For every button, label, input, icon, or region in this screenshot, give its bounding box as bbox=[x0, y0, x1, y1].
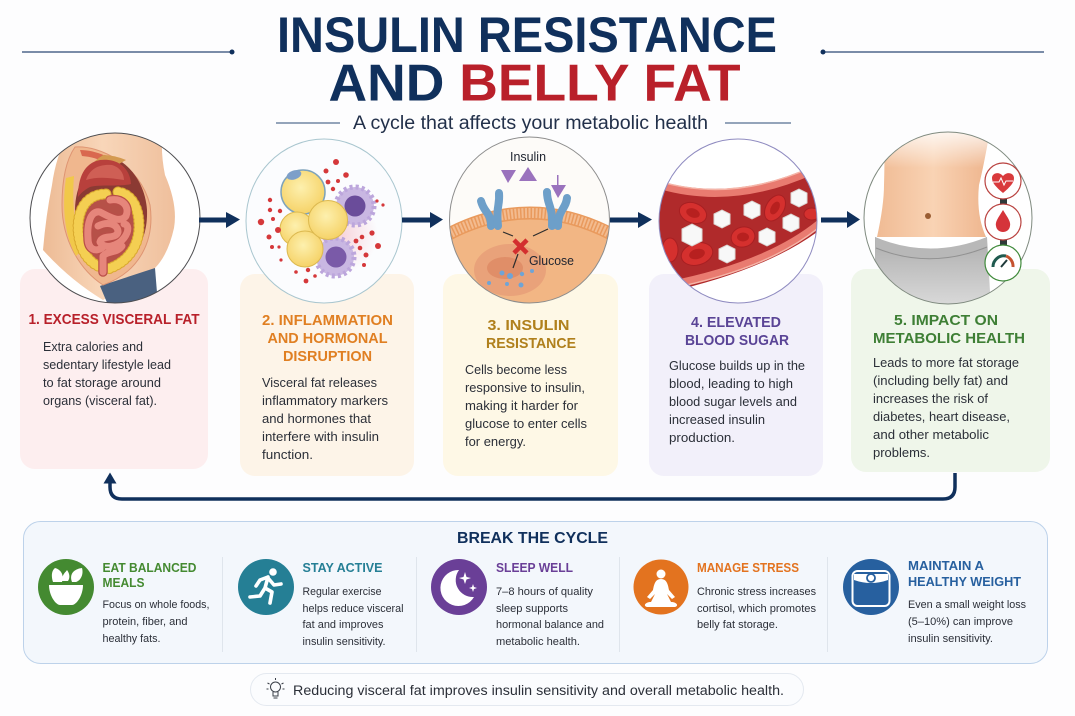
tip: sleep well bbox=[496, 561, 604, 648]
step 3 text bbox=[465, 362, 587, 449]
step 1 text: to fat storage around bbox=[43, 375, 161, 390]
tip: manage stress bbox=[697, 561, 816, 631]
subtitle: A cycle that affects your metabolic health bbox=[353, 113, 708, 134]
tip: maintain a healthy weight: insulin sensitivity. bbox=[908, 633, 993, 645]
arrow: cycle return bbox=[104, 472, 955, 499]
tip: stay active: STAY ACTIVE bbox=[302, 561, 382, 575]
tip: eat balanced meals: protein, fiber, and bbox=[102, 616, 188, 628]
step 4 heading: 4. ELEVATED bbox=[691, 315, 781, 331]
step 1 text: Extra calories and bbox=[43, 339, 143, 354]
step 1 heading: 1. EXCESS VISCERAL FAT bbox=[28, 312, 200, 328]
panel: step 2 card bbox=[240, 274, 414, 476]
signal arrow bbox=[503, 229, 548, 268]
panel: step 4 card bbox=[649, 274, 823, 476]
step 5 text: and other metabolic bbox=[873, 427, 990, 442]
tip: eat balanced meals: Focus on whole foods, bbox=[102, 599, 210, 611]
tip: maintain a healthy weight bbox=[908, 559, 1026, 645]
title bbox=[277, 7, 777, 112]
step 1 text bbox=[43, 339, 171, 408]
step 3 heading: 3. INSULIN bbox=[488, 318, 570, 334]
fat cells bbox=[280, 168, 348, 267]
step 3 text: Cells become less bbox=[465, 362, 567, 377]
step 2 text: interfere with insulin bbox=[262, 429, 379, 444]
left title rule bbox=[22, 50, 234, 54]
step 4 text: increased insulin bbox=[669, 412, 765, 427]
icon: gauge bbox=[985, 245, 1021, 281]
tip: stay active bbox=[302, 561, 404, 648]
liver bbox=[78, 160, 131, 197]
tip: sleep well: hormonal balance and bbox=[496, 619, 604, 631]
tip: stay active: fat and improves bbox=[302, 619, 384, 631]
illustration: abdomen with visceral fat bbox=[30, 130, 200, 305]
insulin label: Insulin bbox=[510, 149, 546, 164]
step 4 heading: BLOOD SUGAR bbox=[685, 333, 789, 349]
red blood cells bbox=[663, 194, 816, 266]
immune cell lower bbox=[316, 238, 354, 276]
illustration: insulin receptors on a cell bbox=[445, 137, 615, 310]
tip: maintain a healthy weight: Even a small weight loss bbox=[908, 599, 1026, 611]
glucose molecules bbox=[487, 269, 534, 288]
step 4 text: blood, leading to high bbox=[669, 376, 793, 391]
step 4 text: production. bbox=[669, 430, 735, 445]
step 3 text: making it harder for bbox=[465, 398, 579, 413]
step 5 heading: 5. IMPACT ON bbox=[894, 313, 998, 329]
icon: weight scale bbox=[843, 559, 899, 615]
step 4 text: blood sugar levels and bbox=[669, 394, 797, 409]
step 4 heading bbox=[685, 315, 789, 349]
tip: stay active: insulin sensitivity. bbox=[302, 636, 386, 648]
panel: break the cycle bbox=[24, 522, 1048, 664]
arrow: step 3 to 4 bbox=[610, 212, 652, 228]
step 2 text: inflammatory markers bbox=[262, 393, 388, 408]
tip: manage stress: Chronic stress increases bbox=[697, 586, 816, 598]
tip: manage stress: MANAGE STRESS bbox=[697, 561, 799, 575]
panel: step 1 card bbox=[20, 269, 208, 469]
tip: sleep well: sleep supports bbox=[496, 603, 568, 615]
step 2 text bbox=[262, 375, 388, 462]
step 5 text: diabetes, heart disease, bbox=[873, 409, 1010, 424]
title: INSULIN RESISTANCE bbox=[277, 7, 777, 63]
step 3 heading bbox=[486, 318, 576, 352]
step 5 heading: METABOLIC HEALTH bbox=[873, 331, 1025, 347]
illustration: blood vessel with sugar cubes bbox=[650, 139, 825, 303]
step 5 text bbox=[873, 355, 1019, 460]
inflammatory markers bbox=[258, 159, 385, 283]
tip: eat balanced meals: MEALS bbox=[102, 576, 144, 590]
step 5 text: problems. bbox=[873, 445, 930, 460]
immune cell upper bbox=[336, 187, 374, 225]
arrow: step 1 to 2 bbox=[199, 212, 240, 228]
step 3 heading: RESISTANCE bbox=[486, 336, 576, 352]
arrow: step 2 to 3 bbox=[402, 212, 443, 228]
step 1 text: sedentary lifestyle lead bbox=[43, 357, 171, 372]
illustration: healthy torso with metric icons bbox=[864, 130, 1032, 310]
sugar cubes bbox=[682, 189, 807, 263]
illustration: fat cells and inflammation bbox=[246, 139, 402, 303]
icon: runner bbox=[238, 559, 294, 615]
title: AND BELLY FAT bbox=[328, 54, 741, 112]
step 2 text: and hormones that bbox=[262, 411, 371, 426]
step 2 heading: DISRUPTION bbox=[283, 349, 372, 365]
tip: sleep well: SLEEP WELL bbox=[496, 561, 573, 575]
step 2 text: Visceral fat releases bbox=[262, 375, 377, 390]
tip: sleep well: metabolic health. bbox=[496, 636, 580, 648]
tip: maintain a healthy weight: (5–10%) can improve bbox=[908, 616, 1013, 628]
tip: eat balanced meals bbox=[102, 561, 210, 645]
tip: sleep well: 7–8 hours of quality bbox=[496, 586, 593, 598]
step 2 heading bbox=[262, 313, 393, 365]
panel: step 3 card bbox=[443, 274, 618, 476]
icon: heart bbox=[985, 163, 1021, 199]
step 5 text: increases the risk of bbox=[873, 391, 988, 406]
icon: meditation bbox=[634, 560, 688, 614]
tip: maintain a healthy weight: HEALTHY WEIGHT bbox=[908, 575, 1021, 589]
glucose label: Glucose bbox=[529, 253, 574, 268]
step 3 text: responsive to insulin, bbox=[465, 380, 585, 395]
arrow: step 4 to 5 bbox=[821, 211, 860, 228]
takeaway text: Reducing visceral fat improves insulin sensitivity and overall metabolic health. bbox=[293, 683, 784, 699]
icon: salad bowl bbox=[38, 559, 94, 615]
step 1 text: organs (visceral fat). bbox=[43, 393, 157, 408]
step 4 text: Glucose builds up in the bbox=[669, 358, 805, 373]
tip: eat balanced meals: healthy fats. bbox=[102, 633, 160, 645]
break the cycle heading: BREAK THE CYCLE bbox=[457, 530, 608, 547]
right title rule bbox=[820, 50, 1044, 54]
step 5 text: (including belly fat) and bbox=[873, 373, 1008, 388]
tip: eat balanced meals: EAT BALANCED bbox=[102, 561, 196, 575]
icon: light bulb bbox=[266, 678, 284, 698]
tip: manage stress: cortisol, which promotes bbox=[697, 603, 816, 615]
tip: stay active: helps reduce visceral bbox=[302, 603, 404, 615]
blocked signal cross bbox=[514, 240, 527, 253]
step 4 text bbox=[669, 358, 805, 445]
receptors bbox=[481, 192, 567, 226]
callout: key takeaway bbox=[250, 674, 804, 706]
icon: blood drop bbox=[985, 204, 1021, 240]
tip: manage stress: belly fat storage. bbox=[697, 619, 778, 631]
tip: maintain a healthy weight: MAINTAIN A bbox=[908, 559, 984, 573]
step 2 text: function. bbox=[262, 447, 313, 462]
step 3 text: for energy. bbox=[465, 434, 526, 449]
panel: step 5 card bbox=[851, 269, 1050, 472]
step 2 heading: AND HORMONAL bbox=[268, 331, 388, 347]
step 5 heading bbox=[873, 313, 1025, 347]
step 3 text: glucose to enter cells bbox=[465, 416, 587, 431]
insulin molecules bbox=[501, 167, 566, 198]
icon: moon and stars bbox=[431, 559, 487, 615]
step 5 text: Leads to more fat storage bbox=[873, 355, 1019, 370]
step 2 heading: 2. INFLAMMATION bbox=[262, 313, 393, 329]
intestines bbox=[88, 200, 128, 272]
tip: stay active: Regular exercise bbox=[302, 586, 382, 598]
fat rings bbox=[78, 194, 106, 266]
